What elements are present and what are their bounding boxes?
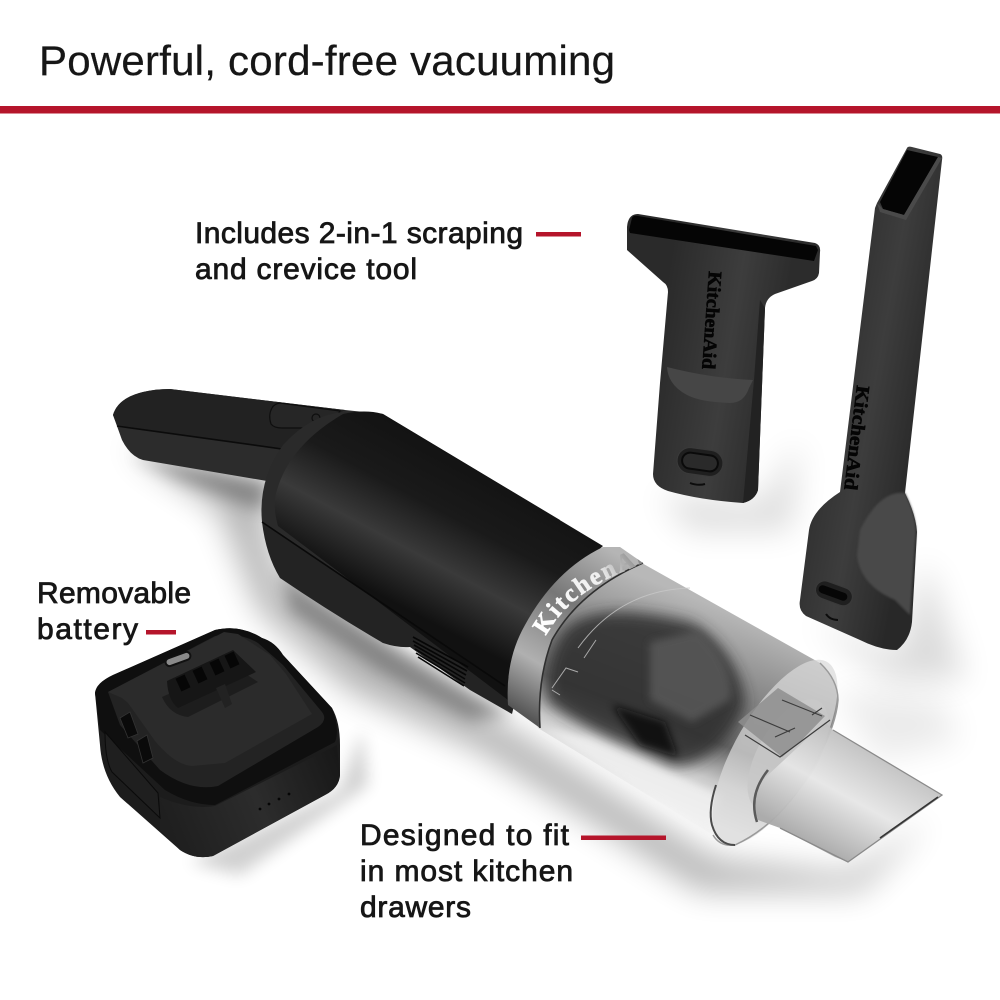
callout: fits in kitchen drawers: drawers [360,891,471,924]
shaded ridge [857,493,916,615]
red header rule [0,106,1000,114]
callout: removable battery [37,577,191,646]
handle [113,389,383,481]
side panel [105,732,160,818]
front side [160,745,340,857]
usb port [164,651,192,667]
seam line [262,522,505,686]
callout: scraping and crevice tool [195,217,581,286]
T-shaped scraping tool [627,214,820,503]
battery top rim [95,628,337,805]
rear cap [261,412,560,680]
tool opening [880,150,938,215]
hand vacuum [100,389,943,863]
connector base [162,665,258,717]
inner ring [731,686,845,824]
silver collar [508,547,643,728]
tool socket [813,578,855,608]
power button [270,403,340,428]
air vent [413,637,468,686]
clear dust cup [535,562,838,845]
tool socket [675,446,725,478]
nozzle [755,722,942,862]
title: Powerful, cord-free vacuuming [39,37,615,84]
callout: fits in kitchen drawers [360,819,666,924]
callout: removable battery: battery [37,613,138,646]
cup bottom highlight [540,727,720,835]
clip [216,684,232,708]
shadows under the products [125,440,965,890]
callout: scraping and crevice tool: and crevice tool [195,253,417,286]
nozzle latch [738,688,825,757]
raised band [667,367,753,403]
main cylinder [275,412,603,700]
tool logo: KitchenAid [839,384,873,492]
tool logo: KitchenAid [697,271,725,370]
callout: fits in kitchen drawers: in most kitchen [360,855,573,888]
side release latches [120,712,153,763]
cup end cap [688,642,862,862]
callout: scraping and crevice tool: Includes 2-in-1 scraping [195,217,523,250]
connector slots [176,652,239,691]
crevice tool [800,147,942,650]
base of body [262,430,540,714]
right side edge [743,300,765,503]
battery pack [95,628,340,857]
top plate [108,635,324,787]
indicator lights [259,793,290,810]
cup window details [552,588,690,695]
callout: removable battery: Removable [37,577,191,610]
dark inner core [547,612,745,766]
tool opening [629,216,818,261]
callout: fits in kitchen drawers: Designed to fit [360,819,570,852]
